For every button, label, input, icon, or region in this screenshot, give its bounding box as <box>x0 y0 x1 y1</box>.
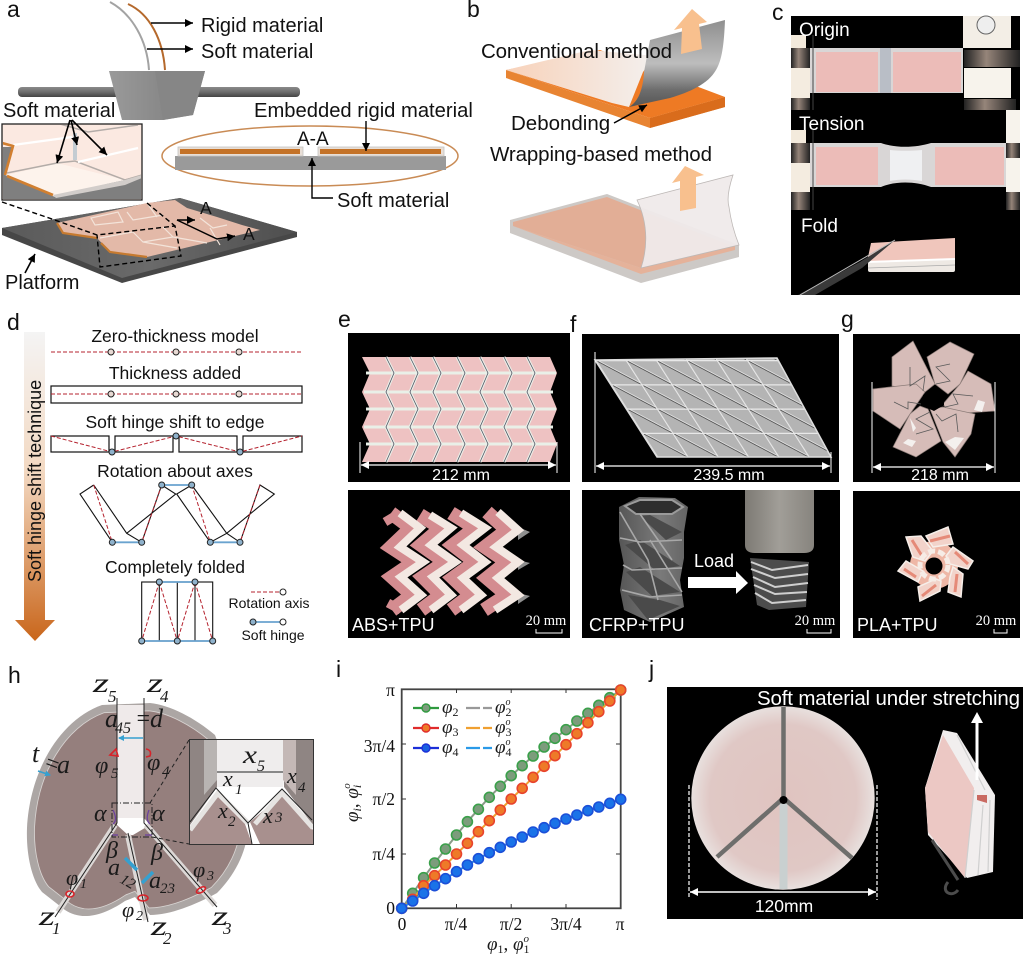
y tick labels: 0 <box>386 898 395 918</box>
tension label: Tension <box>799 114 864 135</box>
tension sample with clamps <box>791 110 1020 210</box>
x axis title: 1 <box>524 942 530 956</box>
symbols on model: d <box>150 704 164 733</box>
symbols on model: φ <box>147 750 160 776</box>
legend: o <box>506 717 511 728</box>
legend: rotation axis: Rotation axis <box>229 595 309 611</box>
symbols on model: β <box>150 840 163 866</box>
label f: f <box>570 311 577 337</box>
panel i: line chart <box>336 656 625 956</box>
panel g: PLA+TPU photos <box>841 306 1020 638</box>
zoomed inset: 3 <box>274 810 282 826</box>
origin sample with clamps <box>791 16 1020 110</box>
section arrows A: A <box>200 198 212 218</box>
rotation about axes: Rotation about axes <box>97 461 253 481</box>
section arrows A <box>177 198 255 244</box>
zoomed inset: 1 <box>235 782 242 798</box>
label: rigid material with arrow: Rigid material <box>201 15 323 37</box>
scale bar 20 mm: 20 mm <box>795 613 836 629</box>
x tick labels: π <box>616 914 625 934</box>
legend: o <box>506 697 511 708</box>
x tick labels: π/4 <box>445 914 467 934</box>
scale bar 20 mm: 20 mm <box>526 613 567 629</box>
symbols on model: z <box>149 911 168 941</box>
symbols on model: = <box>40 749 64 779</box>
vertical arrow label: Soft hinge shift technique <box>25 380 45 582</box>
legend: 4 <box>453 745 459 759</box>
x axis title: o <box>524 933 530 945</box>
y axis title: i <box>350 785 364 788</box>
label: debonding <box>511 105 647 135</box>
legend: o <box>506 737 511 748</box>
symbols on model: 1 <box>52 919 60 938</box>
symbols on model: 2 <box>163 929 172 948</box>
symbols on model: φ <box>193 857 205 882</box>
symbols on model <box>32 668 232 948</box>
legend: 2 <box>453 705 459 719</box>
symbols on model: 5 <box>108 687 116 706</box>
arrow: load <box>688 551 748 594</box>
symbols on model: 5 <box>111 766 119 782</box>
scale bar 20 mm: 20 mm <box>976 613 1017 629</box>
CFRP+TPU label: CFRP+TPU <box>589 615 685 635</box>
zoomed inset: x <box>262 803 273 828</box>
legend: soft hinge <box>241 619 305 643</box>
panel c: tension test photos <box>772 0 1020 295</box>
folded sample with tweezers <box>798 238 955 295</box>
legend: φ <box>495 717 506 738</box>
symbols on model: 3 <box>206 869 214 884</box>
symbols on model: φ <box>66 865 78 890</box>
y axis title: i <box>350 808 364 811</box>
zero-thickness model <box>51 326 301 355</box>
label g: g <box>841 306 854 332</box>
dimension 120mm <box>689 785 877 916</box>
symbols on model: = <box>135 706 151 732</box>
label i: i <box>336 656 341 682</box>
flat CFRP+TPU sheet <box>582 334 839 484</box>
y axis title: φ <box>342 788 363 799</box>
completely folded <box>105 557 245 644</box>
label: soft material with three arrows <box>3 100 115 163</box>
zoomed inset: 2 <box>228 814 236 830</box>
symbols on model: 12 <box>117 872 138 893</box>
three-lobed disc model <box>27 698 248 922</box>
dimension 120mm: 120mm <box>755 896 813 916</box>
series phi2 green <box>402 690 621 908</box>
conventional method illustration <box>506 9 725 128</box>
x tick labels: π/2 <box>500 914 522 934</box>
folded PLA+TPU pinwheel <box>853 491 1020 638</box>
flat ABS+TPU sheet: 212 mm <box>432 467 490 484</box>
origin label: Origin <box>799 20 850 41</box>
label: platform: Platform <box>5 272 79 294</box>
series phi3 red <box>402 690 621 908</box>
zoomed inset <box>190 740 314 844</box>
cross-section A-A <box>162 126 458 186</box>
symbols on model: a <box>57 750 70 779</box>
flat PLA+TPU pinwheel <box>853 334 1020 484</box>
zoomed inset: 4 <box>298 780 306 796</box>
print head with filaments <box>18 2 300 120</box>
legend: 3 <box>506 725 512 739</box>
x tick labels <box>398 914 625 934</box>
symbols on model: β <box>105 838 118 864</box>
soft hinge shift to edge: Soft hinge shift to edge <box>85 412 265 432</box>
symbols on model: z <box>210 901 229 931</box>
legend: φ <box>495 737 506 758</box>
y tick labels <box>364 680 395 918</box>
x axis title: , <box>504 934 513 955</box>
flat ABS+TPU sheet <box>348 333 570 484</box>
panel d: soft hinge shift technique <box>7 309 309 644</box>
y axis title: o <box>341 783 353 789</box>
thickness added: Thickness added <box>109 363 241 383</box>
panel h: kinematic model <box>8 662 314 948</box>
symbols on model: t <box>32 739 40 768</box>
legend: φ <box>442 697 453 718</box>
zero-thickness model: Zero-thickness model <box>91 326 259 346</box>
completely folded: Completely folded <box>105 557 245 577</box>
symbols on model: z <box>37 901 56 931</box>
heading: wrapping-based method: Wrapping-based method <box>490 143 712 166</box>
symbols on model: α <box>94 801 107 827</box>
platform with printed pattern <box>2 198 297 283</box>
panel b: bonding methods <box>467 0 739 283</box>
rotation about axes <box>80 461 274 545</box>
arrow: load: Load <box>694 551 734 571</box>
label e: e <box>338 306 351 332</box>
cylinder and load photos <box>582 490 840 638</box>
x axis title: 1 <box>498 942 504 956</box>
label: platform <box>5 254 79 294</box>
label: embedded rigid material: Embedded rigid material <box>254 100 473 122</box>
label: soft material with arrow: Soft material <box>201 41 313 63</box>
zoomed inset: x <box>222 766 233 791</box>
x tick labels: 0 <box>398 914 407 934</box>
symbols on model: φ <box>122 897 134 922</box>
legend: φ <box>442 737 453 758</box>
folded disc side view <box>925 730 995 894</box>
y axis title: , <box>342 799 363 808</box>
symbols on model: 4 <box>160 687 169 706</box>
symbols on model: 45 <box>115 720 131 737</box>
zoomed inset: 5 <box>257 758 265 775</box>
inset: soft material zoom <box>2 124 142 200</box>
symbols on model: α <box>152 801 165 827</box>
zoomed inset: x <box>242 742 257 769</box>
folded ABS+TPU stack <box>348 490 570 638</box>
gradient arrow <box>15 332 55 641</box>
symbols on model: φ <box>95 753 108 779</box>
arrow: stretching <box>971 712 983 780</box>
label d: d <box>7 309 20 335</box>
series phi4 blue <box>402 799 621 908</box>
y tick labels: 3π/4 <box>364 736 395 756</box>
thickness added <box>51 363 302 403</box>
symbols on model: a <box>105 704 118 733</box>
ABS+TPU label: ABS+TPU <box>352 615 435 635</box>
label: debonding: Debonding <box>511 112 610 135</box>
legend: 4 <box>506 745 512 759</box>
y tick labels: π/4 <box>373 844 395 864</box>
cross-section A-A: A-A <box>297 129 329 150</box>
panel e: ABS+TPU photos <box>338 306 570 638</box>
flat disc <box>691 706 875 890</box>
section arrows A: A <box>243 224 255 244</box>
panel j: disc photo <box>648 656 1023 919</box>
wrapping-based method illustration <box>510 166 739 283</box>
zoomed inset: x <box>286 763 297 788</box>
PLA+TPU label: PLA+TPU <box>857 615 938 635</box>
legend <box>413 697 512 759</box>
symbols on model: 1 <box>80 877 87 892</box>
symbols on model: a <box>149 868 161 894</box>
y tick labels: π/2 <box>373 789 395 809</box>
soft hinge shift to edge <box>51 412 302 455</box>
symbols on model: 4 <box>162 764 170 780</box>
legend: φ <box>495 697 506 718</box>
label j: j <box>648 656 654 682</box>
x axis title: φ <box>513 934 524 955</box>
flat PLA+TPU pinwheel: 218 mm <box>911 467 969 484</box>
label: soft material under section <box>312 158 449 212</box>
x axis title: φ <box>487 934 498 955</box>
legend: 3 <box>453 725 459 739</box>
panel f: CFRP+TPU photos <box>570 311 840 638</box>
symbols on model: z <box>91 668 110 698</box>
label: soft material under section: Soft material <box>337 190 449 212</box>
label h: h <box>8 662 21 688</box>
y tick labels: π <box>386 680 395 700</box>
label: soft material with three arrows: Soft material <box>3 100 115 122</box>
legend: φ <box>442 717 453 738</box>
symbols on model: 2 <box>136 909 143 924</box>
y axis title: φ <box>342 811 363 822</box>
symbols on model: 23 <box>160 881 175 897</box>
panel a: printing setup <box>2 0 473 294</box>
flat CFRP+TPU sheet: 239.5 mm <box>693 467 765 484</box>
fold label: Fold <box>801 216 838 237</box>
chart axes <box>402 689 621 908</box>
zoomed inset: x <box>217 798 228 823</box>
photo background <box>791 16 1020 295</box>
legend: 2 <box>506 705 512 719</box>
photo background <box>667 687 1023 919</box>
symbols on model: 3 <box>222 919 232 938</box>
heading: conventional method: Conventional method <box>481 40 672 63</box>
symbols on model: z <box>145 668 164 698</box>
x tick labels: 3π/4 <box>550 914 582 934</box>
symbols on model: a <box>108 855 120 881</box>
legend: soft hinge: Soft hinge <box>241 627 305 643</box>
annotation: soft material under stretching: Soft material under stretching <box>757 687 1020 710</box>
